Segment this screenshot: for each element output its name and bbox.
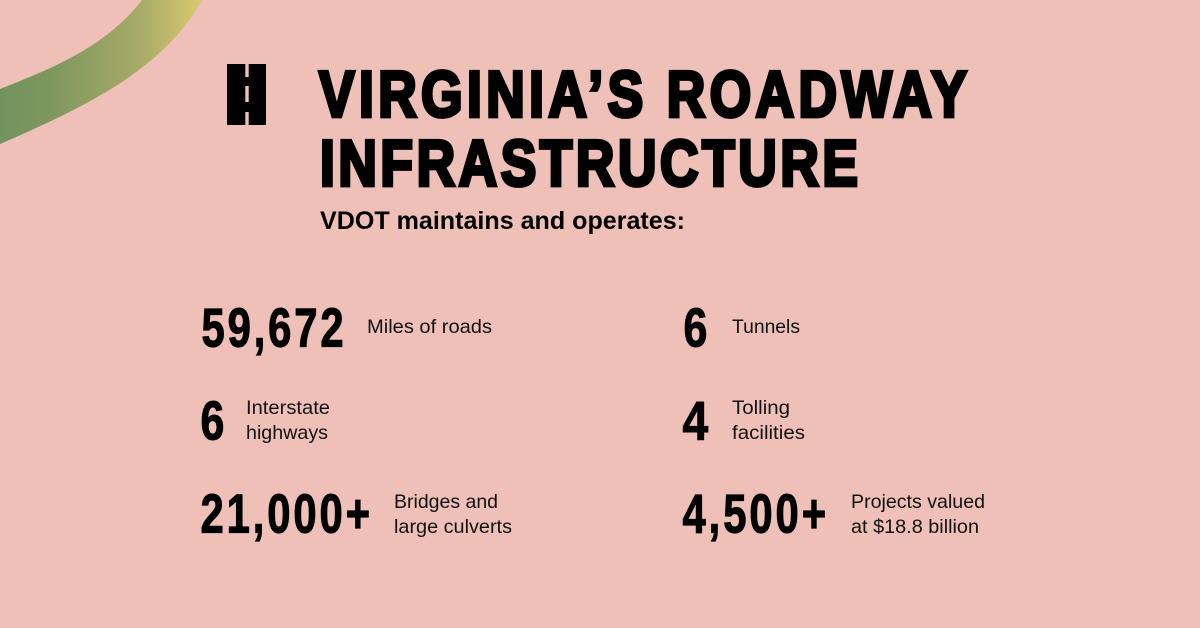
subtitle: VDOT maintains and operates: (320, 207, 685, 235)
stat: projects valued: Projects valued (851, 491, 985, 513)
decorative road ribbon (0, 0, 202, 144)
stat: interstate highways: Interstate (246, 397, 330, 419)
stat: interstate highways: highways (246, 422, 328, 444)
stat: bridges and large culverts: 21,000+ (200, 484, 370, 545)
stat: miles of roads: Miles of roads (367, 316, 492, 338)
stat: projects valued: 4,500+ (682, 484, 826, 545)
stat: bridges and large culverts: Bridges and (394, 491, 498, 513)
stat: miles of roads (202, 298, 492, 359)
stat: tolling facilities (682, 390, 805, 451)
title: VIRGINIA’S ROADWAY (319, 57, 967, 131)
stat: bridges and large culverts: large culverts (394, 516, 512, 538)
stat: bridges and large culverts (200, 484, 512, 545)
stat: projects valued (682, 484, 985, 545)
stat: tolling facilities: facilities (732, 422, 805, 444)
stat: interstate highways (200, 390, 330, 452)
icon: road logo (227, 64, 266, 125)
stat: interstate highways: 6 (200, 390, 224, 452)
title (319, 57, 967, 200)
stat: tolling facilities: 4 (682, 390, 708, 451)
stat: tunnels: 6 (684, 297, 707, 359)
stat: projects valued: at $18.8 billion (851, 516, 979, 538)
stat: tunnels: Tunnels (732, 316, 800, 338)
stat: miles of roads: 59,672 (202, 298, 344, 359)
stat: tunnels (684, 297, 800, 359)
stat: tolling facilities: Tolling (732, 397, 790, 419)
title: INFRASTRUCTURE (320, 126, 858, 200)
